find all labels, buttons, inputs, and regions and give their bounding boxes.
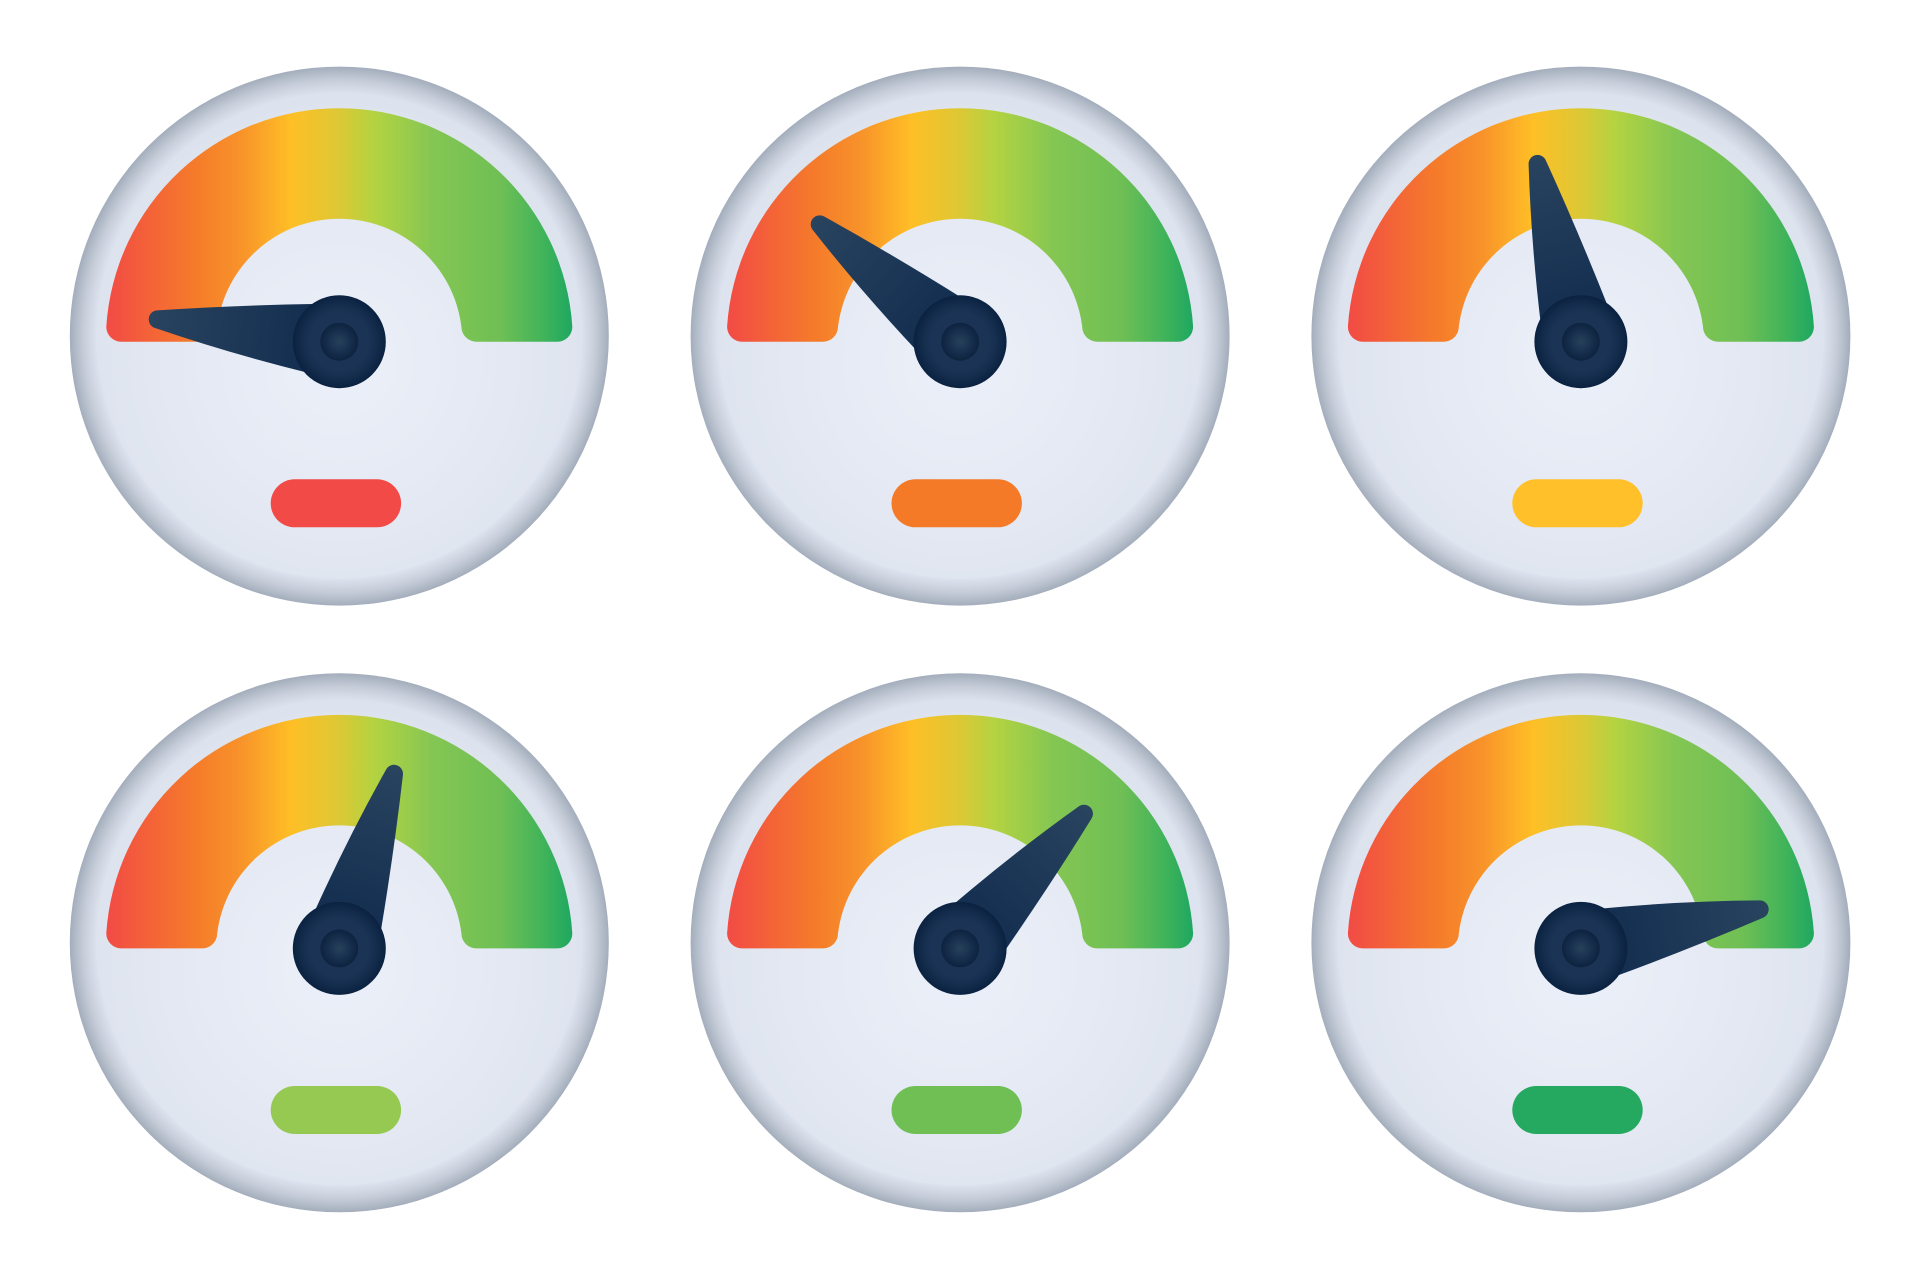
colour band [727, 108, 1193, 342]
dial face [718, 94, 1203, 579]
gauge 2: orange reading [691, 67, 1230, 606]
colour band [727, 715, 1193, 948]
colour band [106, 715, 572, 948]
hub [914, 295, 1007, 388]
dial face [1338, 700, 1823, 1185]
gauge 4: light green reading [70, 673, 609, 1212]
needle [1501, 147, 1609, 326]
dial face [1338, 94, 1823, 579]
colour band [1348, 108, 1814, 342]
needle [313, 755, 430, 935]
colour band [106, 108, 572, 342]
status pill [892, 479, 1022, 527]
hub [1534, 902, 1627, 995]
needle [1598, 873, 1776, 977]
dial rim [1311, 67, 1850, 606]
needle [144, 284, 319, 373]
gauge 3: yellow reading [1311, 67, 1850, 606]
colour band [1348, 715, 1814, 948]
dial face [718, 700, 1203, 1185]
needle [951, 783, 1116, 954]
gauge 6: dark green reading [1311, 673, 1850, 1212]
dial face [97, 700, 582, 1185]
hub [1534, 295, 1627, 388]
dial rim [691, 67, 1230, 606]
gauge 5: green reading [691, 673, 1230, 1212]
status pill [1512, 1086, 1643, 1134]
dial rim [1311, 673, 1850, 1212]
hub [293, 902, 386, 995]
needle [790, 192, 963, 353]
dial rim [691, 673, 1230, 1212]
gauge 1: red reading [70, 67, 609, 606]
status pill [1512, 479, 1643, 527]
dial rim [70, 67, 609, 606]
dial rim [70, 673, 609, 1212]
status pill [892, 1086, 1022, 1134]
status pill [271, 1086, 401, 1134]
hub [293, 295, 386, 388]
status pill [271, 479, 401, 527]
hub [914, 902, 1007, 995]
dial face [97, 94, 582, 579]
